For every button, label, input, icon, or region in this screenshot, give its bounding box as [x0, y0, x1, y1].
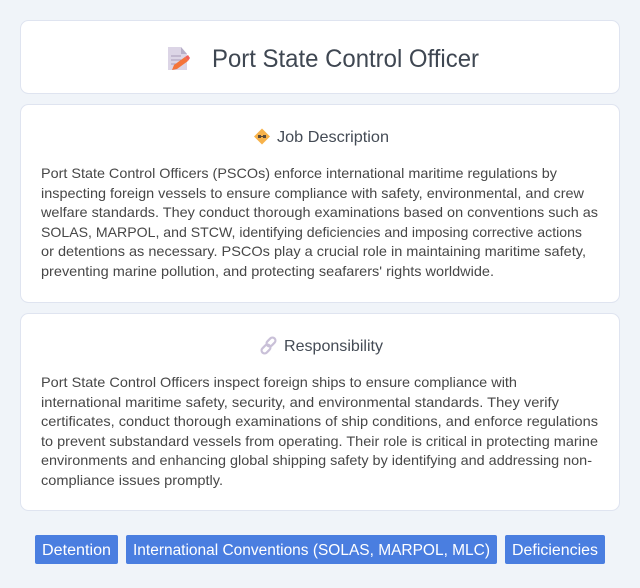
- panel: responsibility: [20, 314, 620, 510]
- tag: Deficiencies: Deficiencies: [512, 542, 598, 559]
- tag: International Conventions: [126, 535, 497, 564]
- text block: job description: preventing marine pollution, and protecting seafarers' rights worldwide.: [41, 263, 494, 279]
- heading: job description: Job Description: [277, 129, 389, 146]
- text block: job description: inspecting foreign vessels to ensure compliance with safety, environmental, and crew: [41, 185, 585, 201]
- text block: responsibility: certificates, conduct thorough examinations of ship conditions, and enforce regulations: [41, 413, 598, 429]
- text block: job description: or detentions as necessary. PSCOs play a crucial role in maintaining maritime safety,: [41, 243, 586, 259]
- icon: chain link: [260, 336, 277, 355]
- text block: responsibility: [41, 374, 598, 488]
- panel: job description: [20, 104, 620, 302]
- tag: Detention: [35, 535, 118, 564]
- header panel: [20, 20, 620, 94]
- icon: diamond sign: [254, 128, 270, 144]
- tag: Detention: Detention: [42, 542, 111, 559]
- text block: job description: SOLAS, MARPOL, and STCW, identifying deficiencies and imposing corrective actions: [41, 224, 582, 240]
- title: Port State Control Officer: [212, 45, 479, 73]
- text block: responsibility: environments and enhancing global shipping safety by identifying and addressing non-: [41, 452, 592, 468]
- text block: job description: [40, 165, 598, 279]
- icon: document with pencil: [168, 47, 190, 70]
- tag: Deficiencies: [505, 535, 605, 564]
- text block: job description: welfare standards. They conduct thorough examinations based on conventions such as: [40, 204, 598, 220]
- text block: responsibility: compliance issues promptly.: [41, 472, 223, 488]
- text block: responsibility: Port State Control Officers inspect foreign ships to ensure compliance with: [41, 374, 517, 390]
- heading: responsibility: Responsibility: [284, 338, 383, 355]
- text block: responsibility: international maritime safety, security, and environmental standards. They verify: [41, 394, 559, 410]
- tag: International Conventions: International Conventions (SOLAS, MARPOL, MLC): [133, 542, 490, 559]
- text block: job description: Port State Control Officers (PSCOs) enforce international maritime regulations by: [41, 165, 557, 181]
- text block: responsibility: to prevent substandard vessels from operating. Their role is critical in protecting marine: [41, 433, 598, 449]
